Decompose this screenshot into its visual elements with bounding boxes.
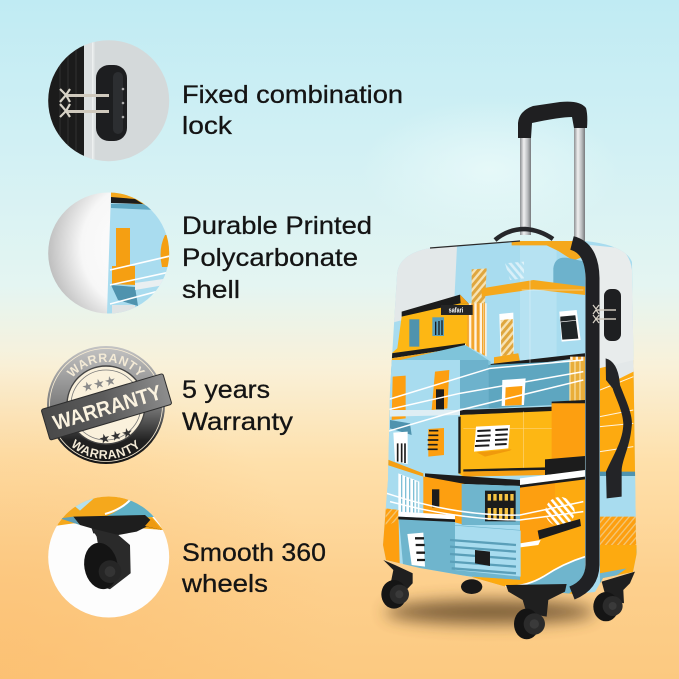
icon: combination lock circle — [48, 40, 170, 162]
wheel: rear right — [593, 572, 635, 621]
icon: polycarbonate shell circle — [48, 192, 170, 314]
suitcase top edge line — [430, 241, 520, 248]
badge lower curved text: WARRANTY — [72, 439, 138, 460]
upper print — [390, 240, 585, 373]
icon: wheel circle — [48, 495, 170, 618]
suitcase floor shadow — [385, 600, 595, 624]
icon: warranty badge — [41, 346, 172, 464]
badge upper stars: ★★★ — [80, 372, 118, 395]
badge banner: WARRANTY — [50, 381, 164, 435]
suitcase side lock — [593, 289, 621, 341]
heading: lock line two: lock — [182, 112, 233, 140]
lower print — [380, 360, 637, 600]
badge lower stars: ★★★ — [97, 424, 135, 447]
suitcase printed shell — [380, 238, 642, 600]
heading: durable shell line two: Polycarbonate — [182, 244, 358, 272]
suitcase side handle — [606, 358, 632, 498]
wheel: rear middle — [461, 579, 482, 594]
heading: wheels: wheels — [181, 570, 268, 598]
heading: warranty: Warranty — [182, 408, 294, 436]
heading: durable shell line three: shell — [182, 276, 240, 304]
heading: durable shell line one: Durable Printed — [182, 212, 372, 240]
right side panel top — [590, 245, 634, 370]
suitcase zipper spine — [572, 243, 592, 593]
heading: fixed combination lock: Fixed combination — [182, 81, 403, 109]
suitcase telescopic handle — [518, 102, 587, 247]
wheel: front centre — [506, 584, 567, 639]
heading: five years: 5 years — [182, 376, 270, 404]
badge upper curved text: WARRANTY — [66, 354, 146, 376]
suitcase carry handle — [495, 229, 553, 240]
wheel: front left — [381, 560, 413, 609]
upper print: safari — [449, 306, 463, 315]
heading: smooth 360: Smooth 360 — [182, 539, 326, 567]
